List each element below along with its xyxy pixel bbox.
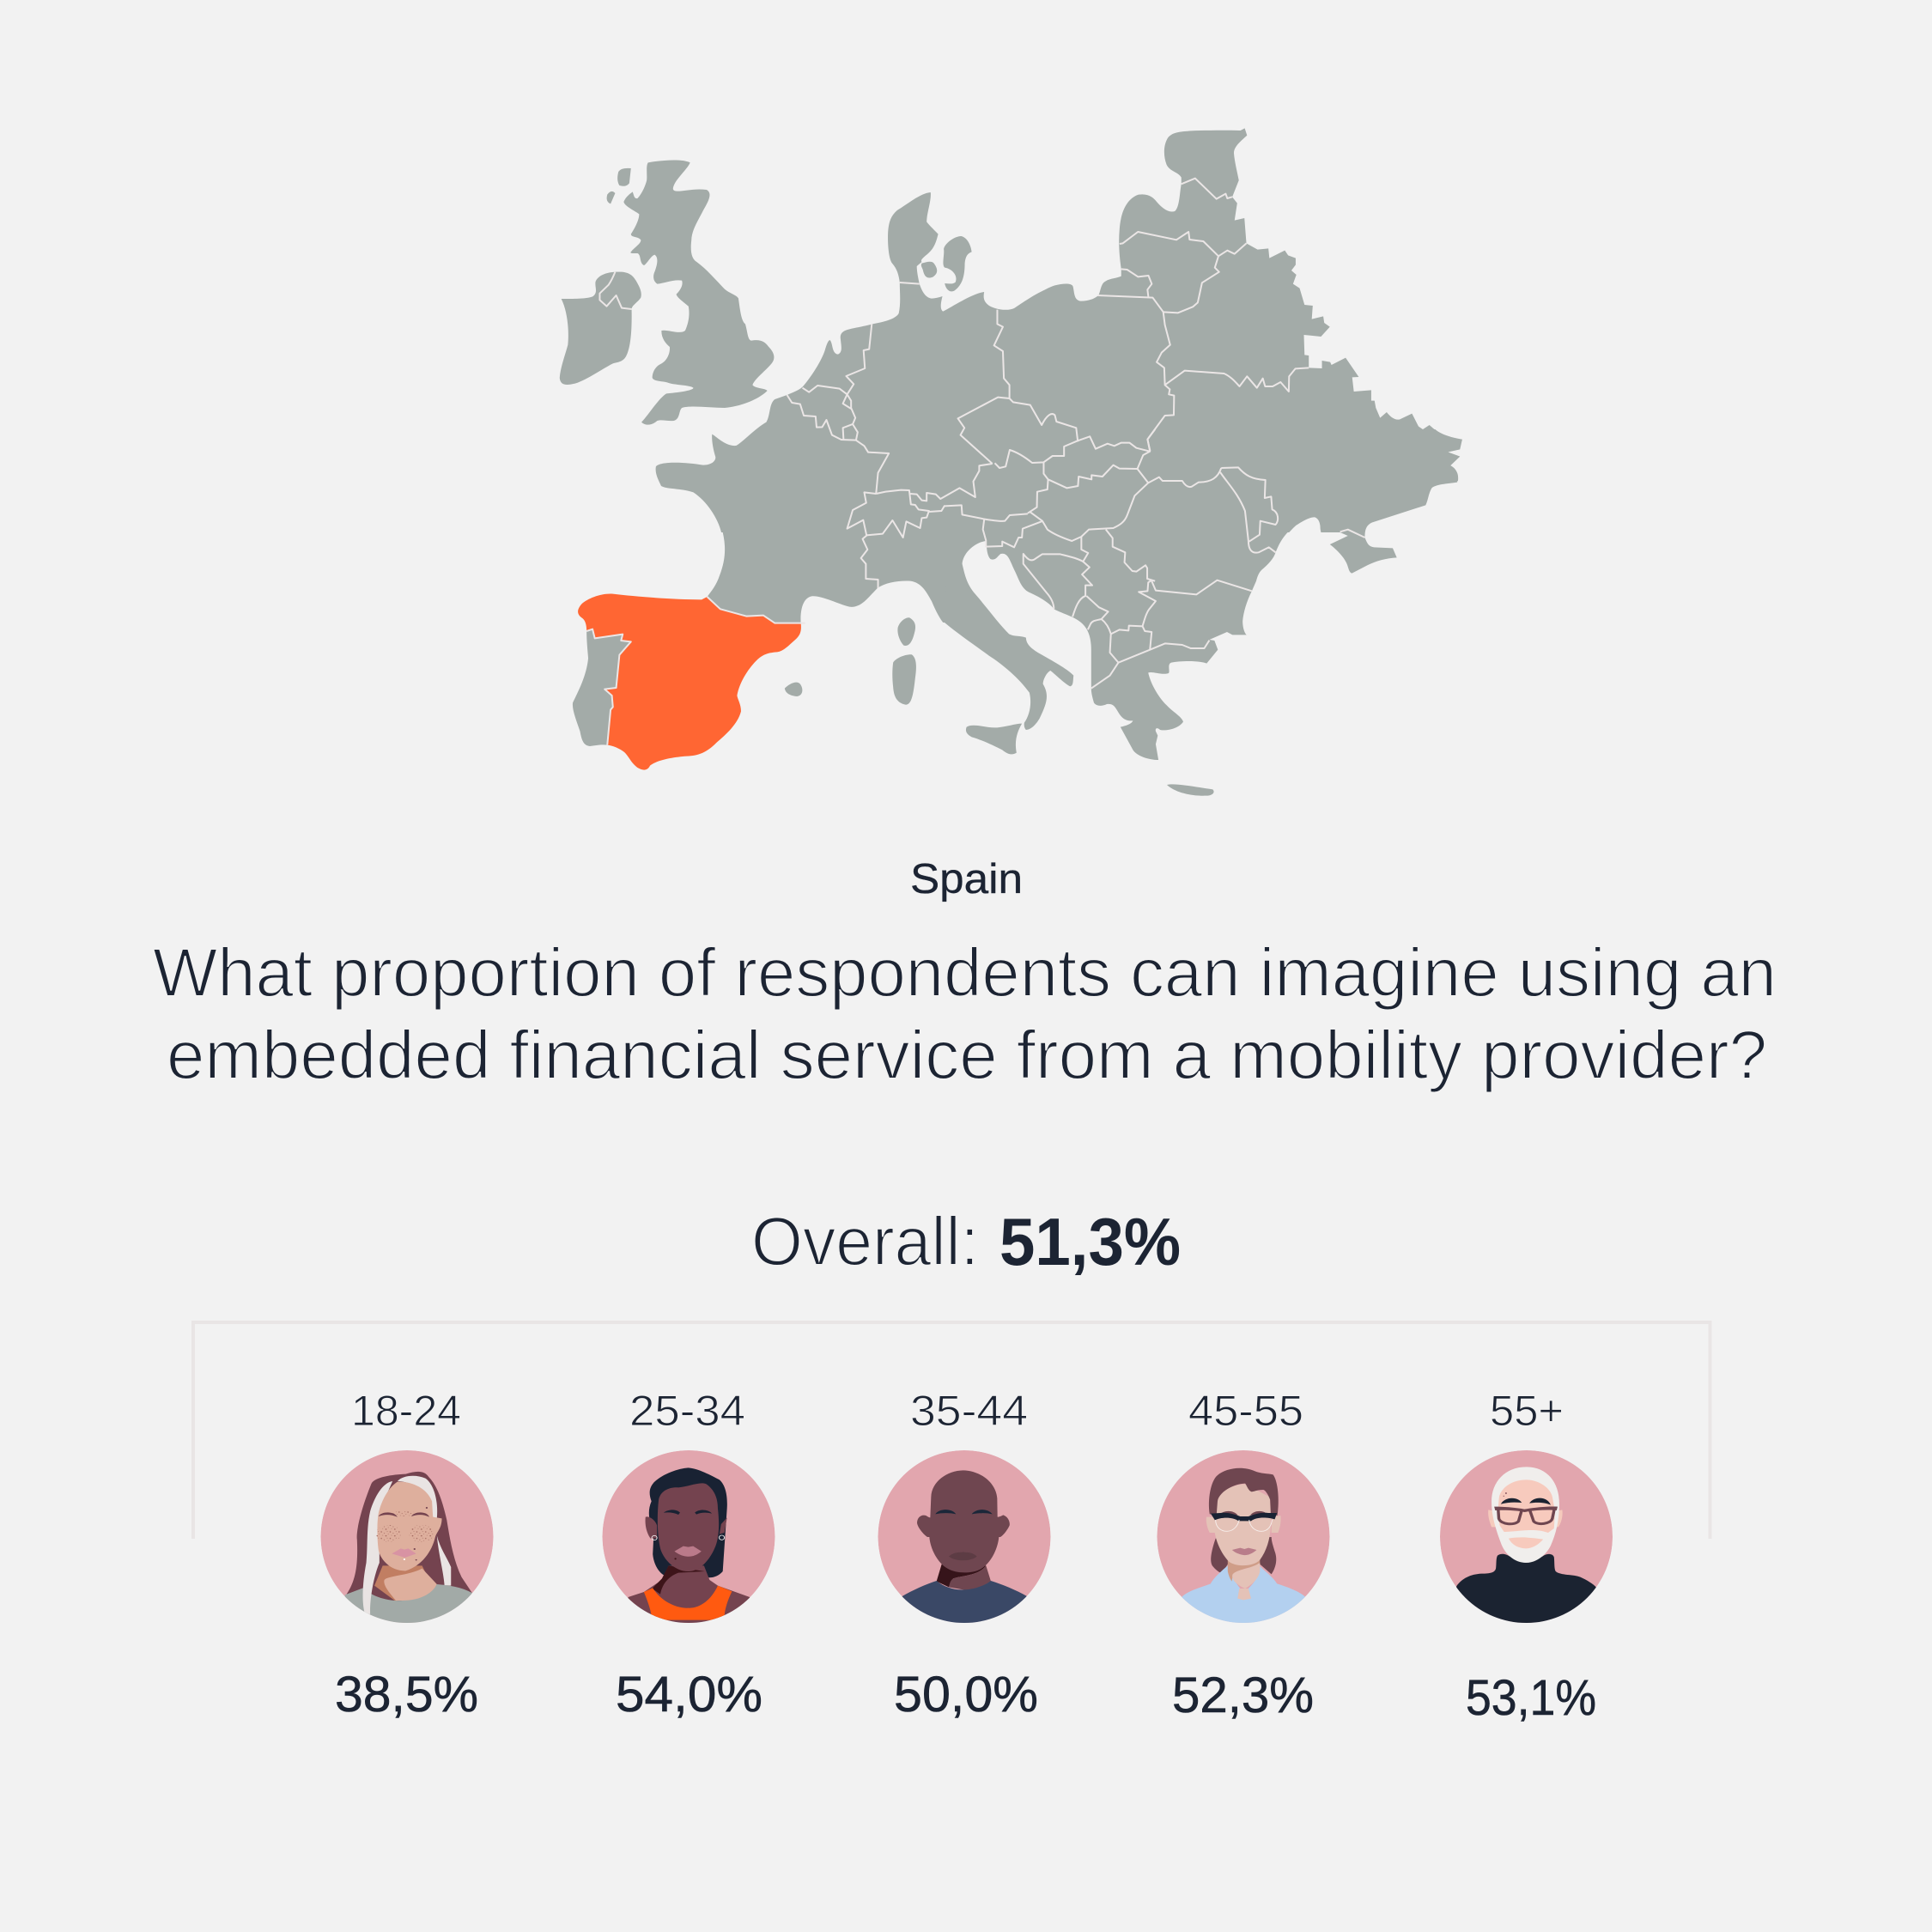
column 45-55 (1157, 1387, 1329, 1723)
map: north-west landmass (560, 160, 1048, 532)
column 35-44 (878, 1387, 1051, 1722)
age label: 25-34 (629, 1387, 745, 1435)
map: north-east landmass (987, 128, 1462, 532)
question heading (153, 934, 1777, 1093)
map of Europe (560, 128, 1462, 796)
overall figure: 51,3% (999, 1204, 1181, 1279)
percentage: 50,0% (894, 1667, 1038, 1722)
map: south-west landmass (573, 490, 945, 770)
overall figure: Overall: (751, 1203, 979, 1279)
map: Spain highlighted (578, 594, 801, 770)
map: south-east landmass (945, 429, 1461, 796)
overall figure (751, 1203, 1181, 1279)
icon: woman with dark hair and orange top (603, 1450, 775, 1625)
age label: 55+ (1490, 1387, 1564, 1435)
percentage: 52,3% (1172, 1668, 1314, 1723)
map: borders north-west (599, 272, 1010, 501)
percentage: 38,5% (335, 1667, 478, 1722)
icon: bald man in navy shirt (878, 1450, 1051, 1625)
question heading: embedded financial service from a mobility provider? (167, 1017, 1767, 1093)
country label: Spain (910, 856, 1023, 902)
question heading: What proportion of respondents can imagine using an (153, 934, 1777, 1011)
column 25-34 (603, 1387, 775, 1722)
age label: 35-44 (910, 1387, 1028, 1435)
icon: young woman with white hair strands (321, 1450, 493, 1625)
age label: 18-24 (351, 1387, 461, 1435)
icon: woman with glasses and blue shirt (1157, 1450, 1329, 1625)
bracket frame (193, 1322, 1710, 1539)
age label: 45-55 (1188, 1387, 1303, 1435)
map: borders south-east (945, 429, 1365, 689)
percentage: 53,1% (1466, 1670, 1596, 1726)
icon: older man with white beard and turtleneck (1440, 1450, 1613, 1625)
map: borders north-east (1010, 179, 1309, 451)
percentage: 54,0% (616, 1667, 762, 1722)
column 18-24 (321, 1387, 493, 1722)
column 55+ (1440, 1387, 1613, 1726)
